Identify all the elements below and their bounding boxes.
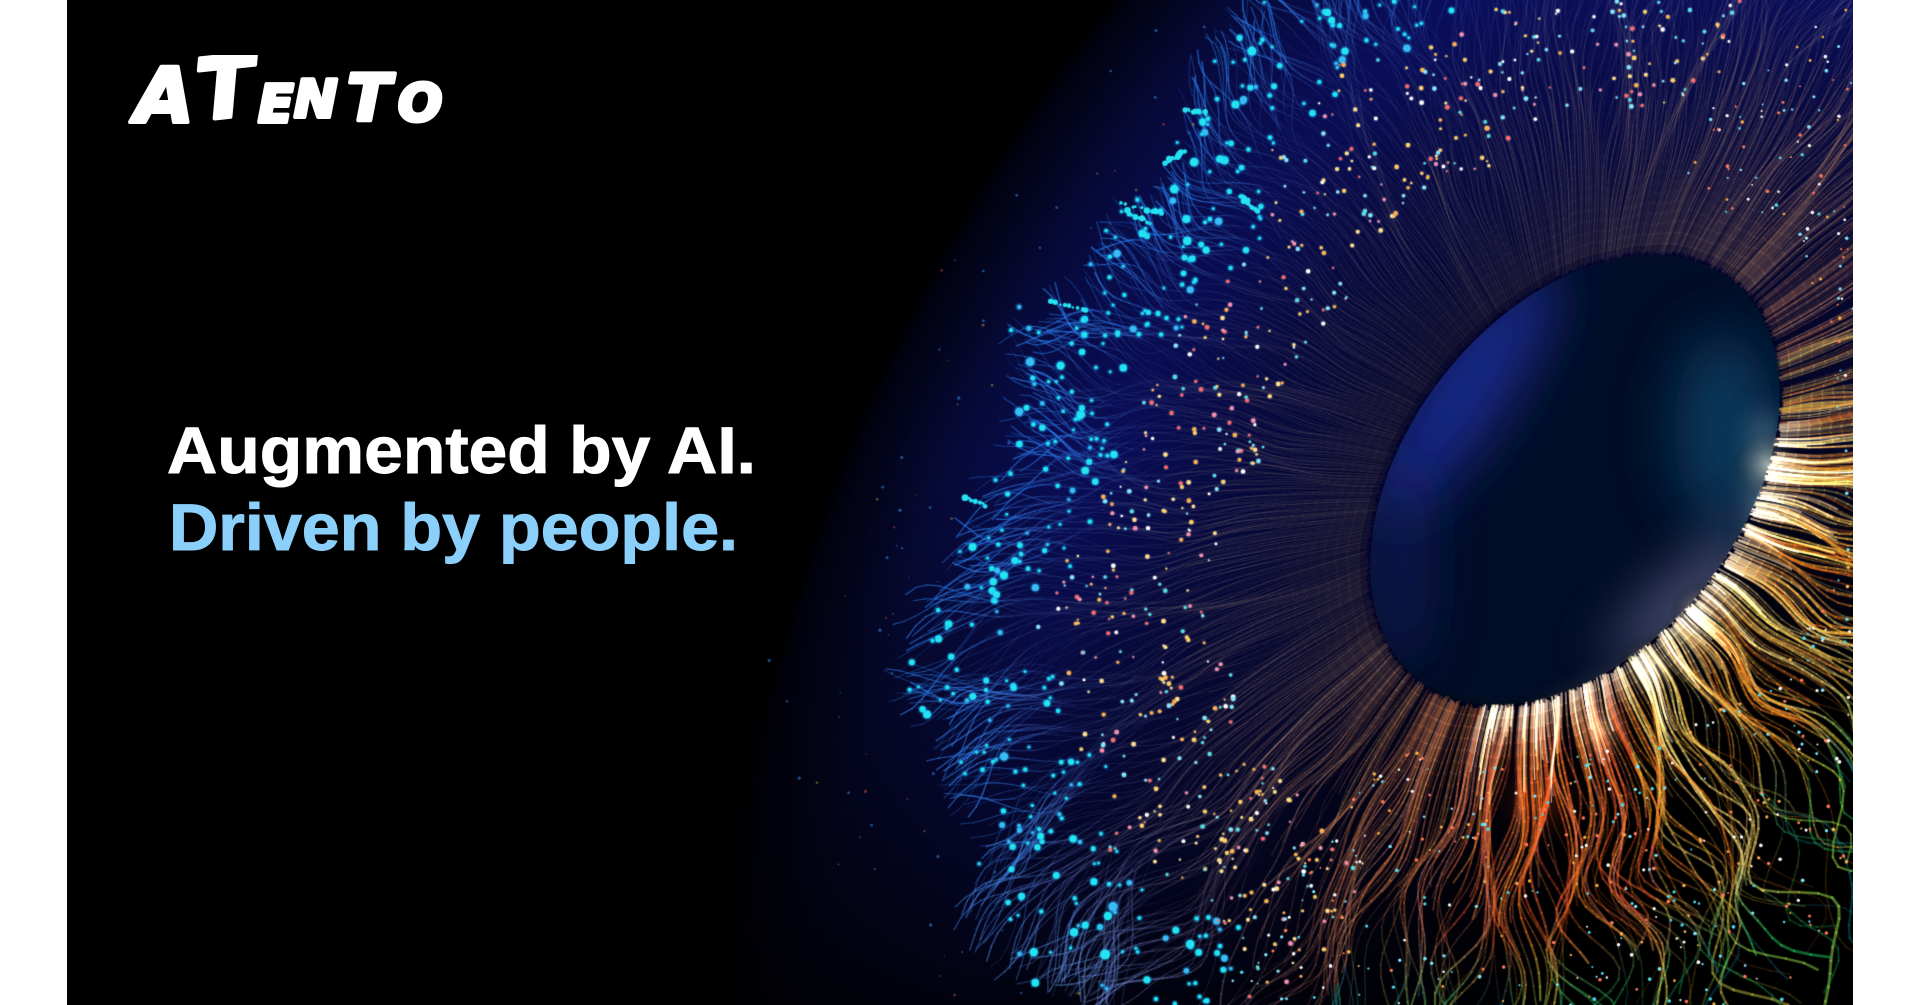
eye base: sclera glow and pupil [758,0,1853,1005]
headline line 1: Augmented by AI. [167,415,756,487]
headline line 2: Driven by people. [169,490,738,564]
logo: ATENTO: O [398,74,442,134]
logo: ATENTO: T [347,62,395,135]
logo: ATENTO: N [294,70,338,130]
headline [167,415,756,564]
logo: ATENTO [128,55,442,135]
pupil [1370,262,1780,708]
logo: ATENTO: E [258,75,294,135]
